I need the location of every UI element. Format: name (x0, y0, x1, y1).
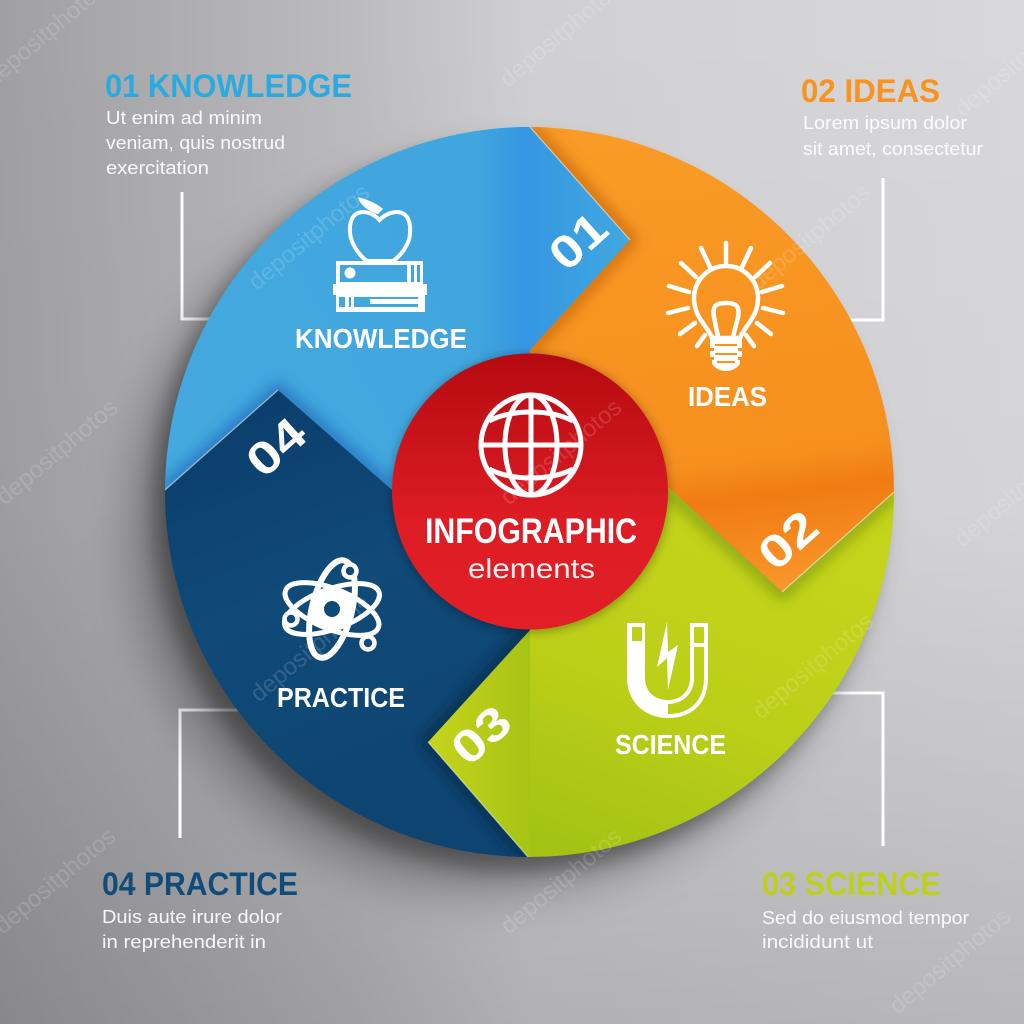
heading: 04 practice: 04 PRACTICE (102, 866, 298, 902)
label: science: SCIENCE (615, 729, 726, 760)
callout bracket: ideas (850, 178, 883, 320)
text block: 04 practice: Duis aute irure dolor (102, 907, 282, 927)
text block: 01 knowledge: Ut enim ad minim (106, 108, 262, 128)
heading: 02 ideas: 02 IDEAS (801, 73, 940, 109)
text block: 03 science: incididunt ut (762, 932, 873, 952)
panel: knowledge segment (165, 127, 630, 490)
circle drop shadow (154, 143, 882, 871)
center circle shadow (391, 354, 669, 632)
watermarks: depositphotos (747, 608, 879, 725)
icon: apple on books (333, 197, 427, 312)
watermarks: depositphotos (884, 903, 1016, 1020)
panel: practice segment (165, 390, 530, 857)
number 03: 03 (441, 695, 521, 775)
watermarks: depositphotos (495, 823, 627, 940)
callout bracket: practice (180, 710, 240, 838)
watermarks: depositphotos (243, 179, 375, 296)
text block: 02 ideas: sit amet, consectetur (803, 139, 983, 159)
title: infographic: INFOGRAPHIC (425, 512, 637, 551)
label: ideas: IDEAS (688, 381, 767, 412)
panel: ideas segment (530, 127, 894, 592)
text block: 02 ideas (801, 73, 983, 159)
text block: 04 practice (102, 866, 298, 952)
fold seams (165, 127, 894, 857)
watermarks: depositphotos (495, 394, 627, 511)
text block: 04 practice: in reprehenderit in (102, 932, 266, 952)
number 02: 02 (748, 500, 828, 580)
watermarks: depositphotos (245, 591, 377, 708)
heading: 03 science: 03 SCIENCE (762, 866, 941, 902)
callout bracket: science (825, 693, 883, 846)
icon: magnet (627, 622, 706, 718)
number 04: 04 (236, 407, 317, 487)
text block: 01 knowledge (105, 68, 352, 178)
heading: 01 knowledge: 01 KNOWLEDGE (105, 68, 352, 104)
text block: 01 knowledge: exercitation (106, 158, 209, 178)
text block: 02 ideas: Lorem ipsum dolor (803, 113, 967, 133)
text block: 03 science (762, 866, 969, 952)
subtitle: elements: elements (468, 553, 595, 584)
panel: center circle (392, 354, 668, 630)
callout bracket: knowledge (182, 192, 215, 319)
label: practice: PRACTICE (277, 682, 405, 713)
icon: globe (481, 395, 581, 495)
icon: atom (278, 556, 386, 662)
watermarks: depositphotos (744, 179, 876, 296)
long soft circle shadow (133, 168, 857, 892)
text block: 01 knowledge: veniam, quis nostrud (106, 133, 285, 153)
icon: light bulb (668, 243, 783, 371)
panel: science segment (420, 480, 910, 870)
label: knowledge: KNOWLEDGE (295, 323, 467, 354)
text block: 03 science: Sed do eiusmod tempor (762, 908, 969, 928)
number 01: 01 (538, 202, 618, 280)
